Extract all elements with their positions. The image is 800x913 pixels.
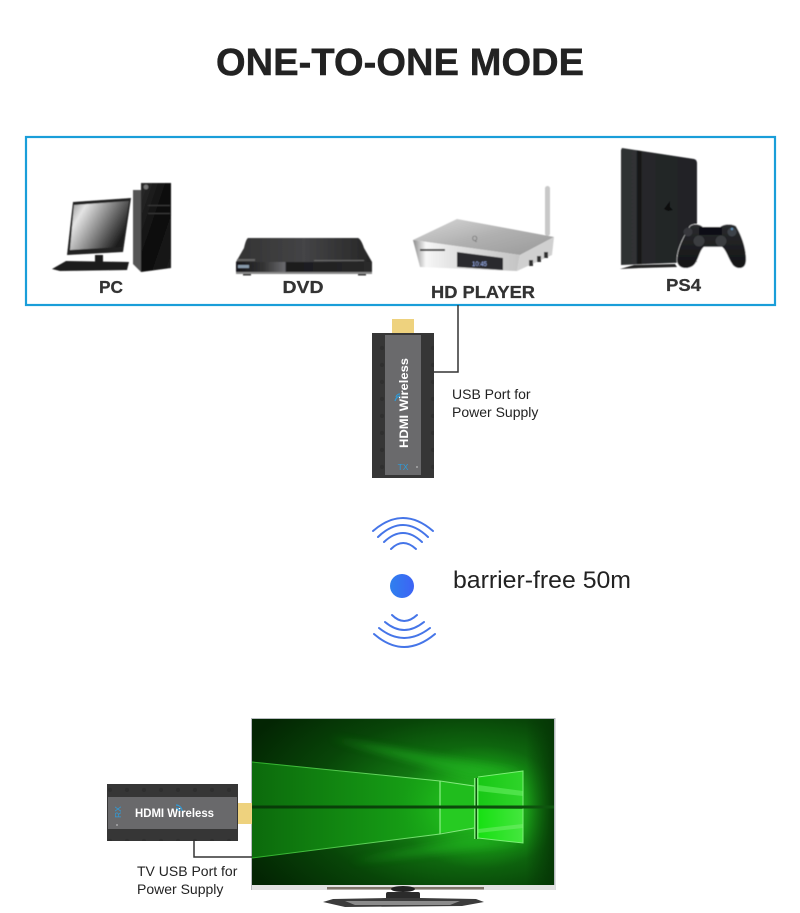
label: DVD: DVD <box>282 277 324 297</box>
text: USB power note: USB Port for <box>452 386 531 402</box>
label: RX: RX <box>113 806 123 818</box>
text: USB power note: Power Supply <box>452 404 538 420</box>
icon: wifi mark <box>395 394 400 401</box>
icon: RX HDMI dongle <box>107 784 252 841</box>
label: HDMI Wireless: HDMI Wireless <box>399 358 411 448</box>
arrow: RX power cable <box>194 841 252 857</box>
title: ONE-TO-ONE MODE <box>216 42 584 84</box>
label: PS4: PS4 <box>666 275 701 295</box>
label: TX: TX <box>398 462 409 472</box>
icon: HD player <box>413 186 554 271</box>
text: TV USB power note: TV USB Port for <box>137 863 238 879</box>
icon: PS4 with controller <box>620 148 746 269</box>
icon: wireless signal bottom <box>374 615 435 647</box>
icon: PC <box>52 183 171 272</box>
label: PC: PC <box>99 277 123 297</box>
icon: HD player: Q <box>472 235 479 243</box>
icon: blue dot <box>390 574 414 598</box>
text: range: barrier-free 50m <box>453 567 631 594</box>
label: HDMI Wireless: HDMI Wireless <box>135 808 214 820</box>
label: HD PLAYER: HD PLAYER <box>431 282 535 302</box>
icon: DVD player <box>236 238 372 276</box>
icon: TX HDMI dongle <box>372 319 434 478</box>
panel: source devices <box>26 137 775 305</box>
icon: wireless signal top <box>373 518 433 549</box>
arrow: TX power cable <box>434 305 458 372</box>
icon: HD player: 10:45 <box>472 262 488 268</box>
text: TV USB power note: Power Supply <box>137 881 223 897</box>
window light rays <box>252 719 565 885</box>
icon: television <box>251 718 565 907</box>
icon: wifi mark <box>176 805 182 811</box>
